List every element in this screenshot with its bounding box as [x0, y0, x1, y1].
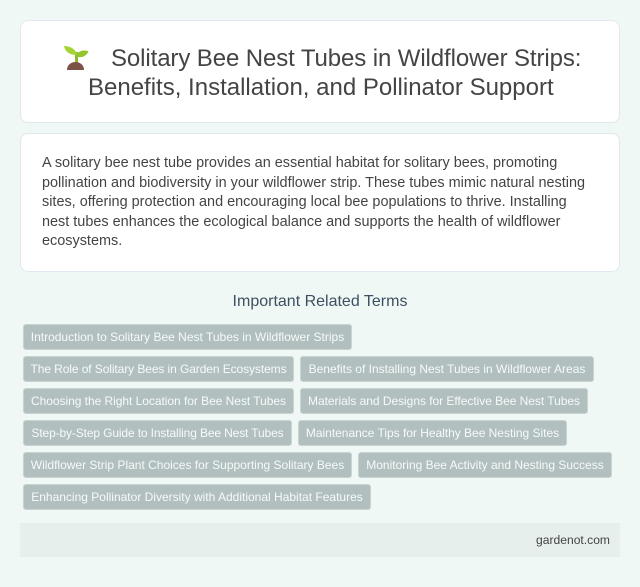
tag: [23, 324, 352, 350]
icon: seedling: [64, 46, 88, 70]
footer bar: [20, 523, 620, 557]
tag: Choosing the Right Location for Bee Nest Tubes: [31, 394, 286, 408]
footer text: gardenot.com: [536, 533, 610, 547]
text block: description: A solitary bee nest tube provides an essential habitat for solitary bees, promoting: [42, 155, 557, 171]
tag: [23, 452, 352, 478]
tag: Materials and Designs for Effective Bee Nest Tubes: [308, 394, 580, 408]
tag: [23, 420, 292, 446]
tag: Wildflower Strip Plant Choices for Supporting Solitary Bees: [31, 458, 344, 472]
tag: [358, 452, 612, 478]
text block: description: ecosystems.: [42, 233, 122, 249]
panel: description: [20, 133, 620, 272]
title: Benefits, Installation, and Pollinator Support: [88, 74, 554, 101]
tag: [298, 420, 567, 446]
tag: [23, 388, 294, 414]
tag: [300, 356, 594, 382]
tag: The Role of Solitary Bees in Garden Ecosystems: [30, 362, 286, 376]
tag: Enhancing Pollinator Diversity with Additional Habitat Features: [31, 490, 363, 504]
tag: Introduction to Solitary Bee Nest Tubes in Wildflower Strips: [31, 330, 344, 344]
tag: Maintenance Tips for Healthy Bee Nesting Sites: [306, 426, 559, 440]
tag list: [23, 324, 612, 510]
tag: [23, 484, 371, 510]
tag: Monitoring Bee Activity and Nesting Success: [366, 458, 604, 472]
text block: description: sites, offering protection and encouraging local bee populations to thrive. Installing: [42, 194, 567, 210]
tag: Step-by-Step Guide to Installing Bee Nest Tubes: [31, 426, 284, 440]
text block: description: pollination and biodiversity in your wildflower strip. These tubes mimic natural nesting: [42, 174, 585, 190]
panel: title card: [20, 20, 620, 123]
tag: [300, 388, 588, 414]
title: [88, 45, 581, 101]
heading: related terms: Important Related Terms: [233, 293, 407, 310]
tag: [23, 356, 294, 382]
text block: description: [42, 155, 585, 249]
tag: Benefits of Installing Nest Tubes in Wildflower Areas: [309, 362, 585, 376]
text block: description: nest tubes enhances the ecological balance and supports the health of wildflower: [42, 214, 560, 230]
title: Solitary Bee Nest Tubes in Wildflower Strips:: [111, 45, 581, 72]
